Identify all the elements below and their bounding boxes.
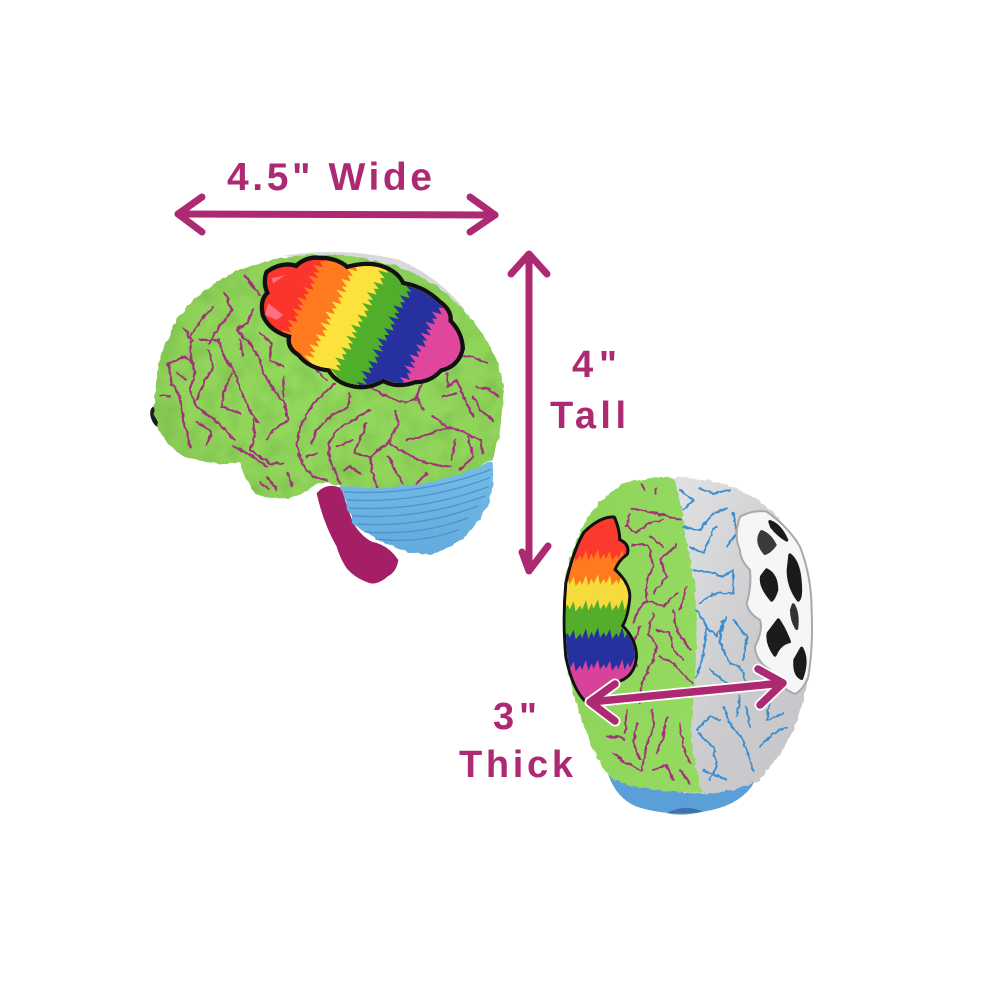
arrow: thickness [590, 669, 783, 721]
label: width: 4.5" Wide [227, 156, 432, 199]
blue veins [680, 488, 787, 780]
cerebrum [154, 255, 503, 498]
brain front view [533, 477, 824, 970]
patch outline [264, 260, 461, 385]
label: height [550, 344, 626, 437]
grey hemisphere [663, 477, 812, 793]
veins [160, 275, 498, 490]
base shadow [667, 808, 703, 815]
patch colours [566, 518, 635, 700]
label: thickness [459, 696, 574, 786]
cow spots [759, 522, 805, 678]
label: thickness: Thick [459, 744, 574, 786]
label: height: Tall [550, 395, 626, 437]
patch colours [264, 260, 461, 385]
brain side view [148, 159, 757, 618]
patch outline [566, 518, 635, 700]
stem [317, 486, 398, 584]
blue base [608, 775, 757, 813]
cerebellum [340, 462, 493, 555]
cow patch shape [737, 511, 812, 694]
rainbow patch front [562, 515, 638, 703]
nub [148, 405, 166, 429]
label: thickness: 3" [493, 696, 537, 738]
cerebellum ridges [345, 470, 490, 540]
arrow: height [511, 254, 548, 571]
top grey edge [283, 252, 465, 310]
maroon veins [607, 485, 692, 783]
cow patch [737, 511, 812, 694]
green hemisphere [564, 477, 702, 792]
arrow: width [178, 197, 495, 232]
rainbow patch [260, 255, 465, 390]
label: height: 4" [572, 344, 617, 386]
